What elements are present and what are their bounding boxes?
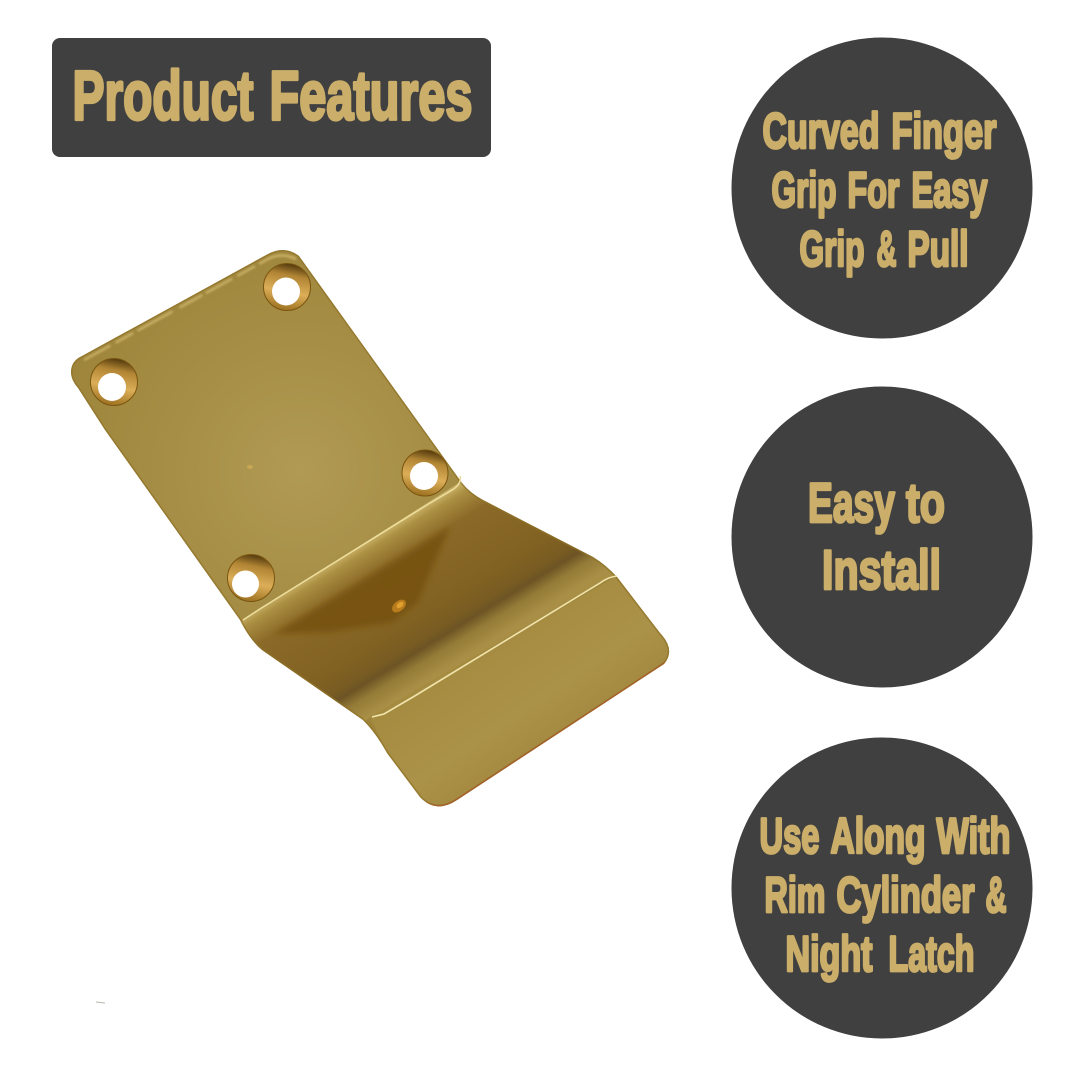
feature circle: easy to install: to	[906, 471, 945, 534]
heading: Product Features: Features	[270, 56, 472, 134]
feature circle: curved finger grip: Curved	[762, 103, 880, 159]
product image: brass finger pull plate	[60, 240, 680, 820]
heading: Product Features	[52, 38, 491, 157]
screw hole right	[402, 450, 448, 496]
feature circle: curved finger grip: Grip	[800, 221, 864, 277]
feature circle: use with rim cylinder and night latch: Along	[830, 808, 926, 864]
edge glints along the top	[84, 256, 296, 360]
feature circle: curved finger grip: Pull	[908, 221, 968, 277]
feature circle: use with rim cylinder and night latch: Latch	[888, 926, 974, 982]
glint	[390, 597, 408, 615]
groove of the curved finger grip	[235, 482, 625, 730]
feature circle: use with rim cylinder and night latch: Use	[760, 808, 820, 864]
feature circle: curved finger grip: &	[876, 221, 896, 277]
feature circle: curved finger grip	[732, 38, 1032, 338]
feature circle: use with rim cylinder and night latch: Cylinder	[836, 867, 974, 923]
dark reflection in groove	[275, 527, 450, 634]
feature circle: easy to install	[732, 386, 1032, 688]
feature circle: use with rim cylinder and night latch: &	[986, 867, 1006, 923]
feature circle: easy to install: Easy	[808, 471, 895, 534]
speck	[96, 1002, 105, 1003]
feature circle: use with rim cylinder and night latch: Night	[786, 926, 873, 982]
feature circle: curved finger grip: Finger	[892, 103, 996, 159]
feature circle: use with rim cylinder and night latch	[732, 738, 1032, 1038]
feature circle: curved finger grip: For	[848, 162, 900, 218]
feature circle: curved finger grip: Grip	[772, 162, 836, 218]
feature circle: use with rim cylinder and night latch: Rim	[764, 867, 826, 923]
feature circle: use with rim cylinder and night latch: With	[936, 808, 1010, 864]
highlight line upper bend	[243, 476, 460, 620]
rim shading	[71, 250, 669, 806]
highlight line lower bend	[372, 576, 617, 717]
heading: Product Features: Product	[72, 56, 254, 134]
lower lip	[370, 576, 680, 820]
screw hole left	[90, 358, 138, 406]
screw hole top	[264, 264, 310, 310]
feature circle: curved finger grip: Easy	[912, 162, 988, 218]
feature circle: easy to install: Install	[822, 538, 941, 601]
screw hole bottom	[228, 554, 274, 602]
